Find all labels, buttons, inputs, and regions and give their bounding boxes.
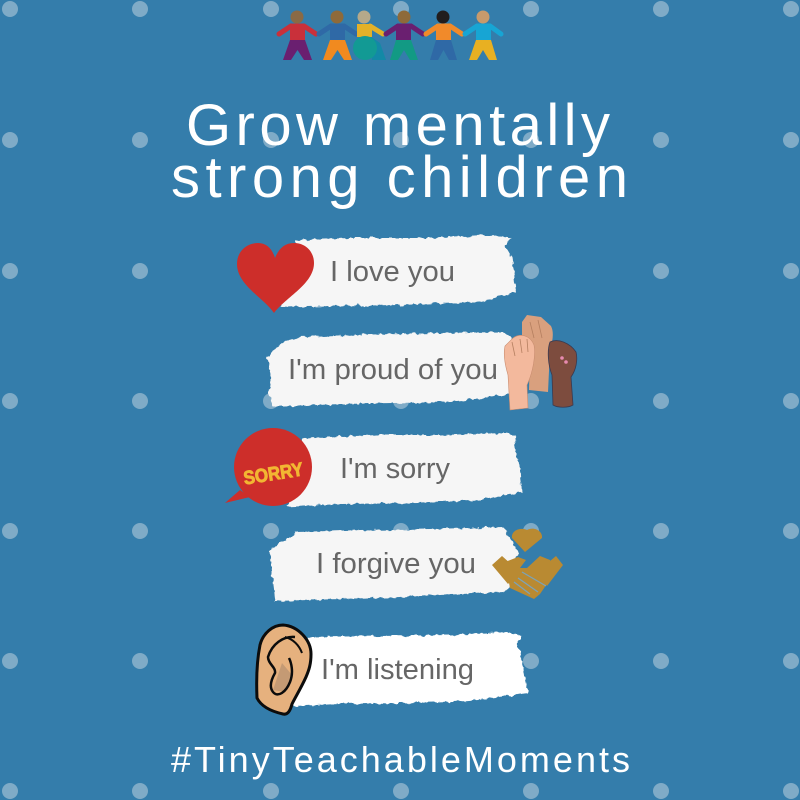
label: I'm listening — [321, 654, 474, 686]
brush strip — [293, 632, 528, 706]
icon: handshake with heart — [492, 529, 563, 599]
panel: I'm proud of you — [267, 315, 577, 410]
child 3 in wheelchair — [353, 10, 386, 60]
label: I love you — [330, 256, 455, 288]
label: I'm proud of you — [288, 354, 498, 386]
brush strip — [267, 332, 525, 407]
brush strip — [287, 433, 522, 507]
icon: sorry speech bubble — [225, 428, 312, 506]
brush strip — [282, 235, 516, 307]
panel: I forgive you — [270, 527, 563, 601]
panel: I'm sorry — [225, 428, 522, 507]
label: I forgive you — [316, 548, 476, 580]
label: I'm sorry — [340, 453, 450, 485]
child 5 — [426, 10, 462, 60]
panel: I'm listening — [257, 625, 528, 714]
icon: sorry speech bubble: SORRY — [242, 459, 305, 490]
child 6 — [465, 10, 501, 60]
icon: heart — [237, 243, 314, 313]
title — [171, 93, 628, 210]
icon: ear — [257, 625, 311, 714]
icon: three raised fists — [504, 315, 577, 410]
hashtag: #TinyTeachableMoments — [171, 739, 630, 780]
title: strong children — [171, 145, 628, 210]
title: Grow mentally — [186, 93, 610, 158]
child 4 — [386, 10, 423, 60]
panel: I love you — [237, 235, 516, 313]
icon: row of paper-doll children holding hands — [279, 10, 501, 60]
child 2 — [319, 10, 356, 60]
brush strip — [270, 527, 518, 601]
child 1 — [279, 10, 316, 60]
